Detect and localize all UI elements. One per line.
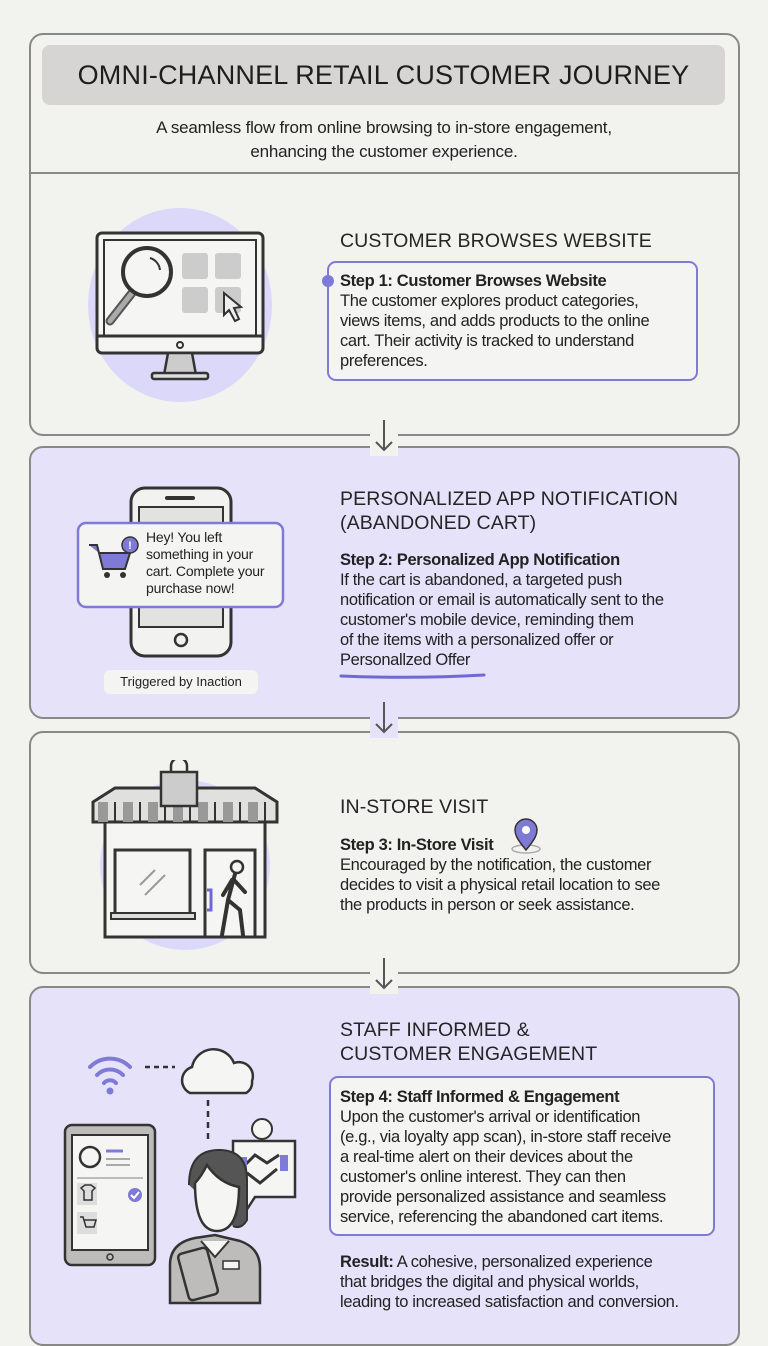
heading: step 2: PERSONALIZED APP NOTIFICATION [340,488,678,510]
callout: step 4: Upon the customer's arrival or identification [340,1108,640,1126]
speech bubble with smiley and handshake [252,1119,272,1139]
callout: step 4: service, referencing the abandoned cart items. [340,1208,663,1226]
icon: location pin [511,818,541,854]
callout: step 4: Step 4: Staff Informed & Engagement [340,1088,619,1106]
callout: step 1 [327,261,698,381]
icon: phone with notification: Hey! You left [146,529,222,545]
text: step 3: Step 3: In-Store Visit [340,836,493,854]
title [42,45,725,105]
text: result: Result: A cohesive, personalized experience [340,1253,652,1271]
heading: step 2 [340,488,678,534]
callout: step 1: preferences. [340,352,428,370]
text: step 2: of the items with a personalized offer or [340,631,613,649]
panel: step 3 [29,731,740,974]
text: step 2: Step 2: Personalized App Notification [340,551,620,569]
heading: step 3: IN-STORE VISIT [340,796,488,818]
text: step 2: If the cart is abandoned, a targeted push [340,571,622,589]
arrow 2 [370,702,398,738]
text: step 3 [340,836,660,914]
text: step 3: the products in person or seek assistance. [340,896,634,914]
panel: step 2 [29,446,740,719]
callout: step 4: customer's online interest. They can then [340,1168,626,1186]
icon: phone with notification: ! [128,540,132,552]
heading: step 2: (ABANDONED CART) [340,512,536,534]
callout: step 4: provide personalized assistance and seamless [340,1188,666,1206]
heading: step 1: CUSTOMER BROWSES WEBSITE [340,230,652,252]
heading: step 4 [340,1019,597,1065]
icon: monitor with magnifier [88,208,272,402]
callout: step 1: cart. Their activity is tracked to understand [340,332,634,350]
text: step 2: Personallzed Offer [340,651,470,669]
icon: store front [92,760,278,950]
text: step 3: Encouraged by the notification, the customer [340,856,651,874]
subtitle [156,118,612,161]
icon: phone with notification: cart. Complete your [146,563,265,579]
callout: step 4: (e.g., via loyalty app scan), in-store staff receive [340,1128,671,1146]
title: OMNI-CHANNEL RETAIL CUSTOMER JOURNEY [78,60,689,90]
icon: phone with notification: something in your [146,546,254,562]
label: triggered by inaction: Triggered by Inaction [120,674,242,689]
text: step 2: customer's mobile device, reminding them [340,611,634,629]
heading: step 4: STAFF INFORMED & [340,1019,530,1041]
callout: step 1: views items, and adds products to the online [340,312,649,330]
text: step 2: notification or email is automatically sent to the [340,591,664,609]
panel: header and step 1 [29,33,740,436]
icon: staff with tablet, cloud, wifi [64,1048,296,1304]
icon: phone with notification [76,486,284,658]
text: result: that bridges the digital and physical worlds, [340,1273,639,1291]
callout: step 4: a real-time alert on their devices about the [340,1148,633,1166]
heading: step 4: CUSTOMER ENGAGEMENT [340,1043,597,1065]
icon: phone with notification: purchase now! [146,580,234,596]
callout: step 1: Step 1: Customer Browses Website [340,272,606,290]
text: result: leading to increased satisfaction and conversion. [340,1293,679,1311]
text: result [340,1253,679,1311]
arrow 1 [370,420,398,456]
underline [340,674,486,679]
panel: step 4 [29,986,740,1346]
label: triggered by inaction [104,670,258,694]
arrow 3 [370,958,398,994]
text: step 3: decides to visit a physical retail location to see [340,876,660,894]
text: step 2 [340,551,664,669]
subtitle: A seamless flow from online browsing to in-store engagement, [156,118,612,137]
callout: step 1: The customer explores product categories, [340,292,638,310]
callout: step 4 [329,1076,715,1236]
subtitle: enhancing the customer experience. [250,142,518,161]
